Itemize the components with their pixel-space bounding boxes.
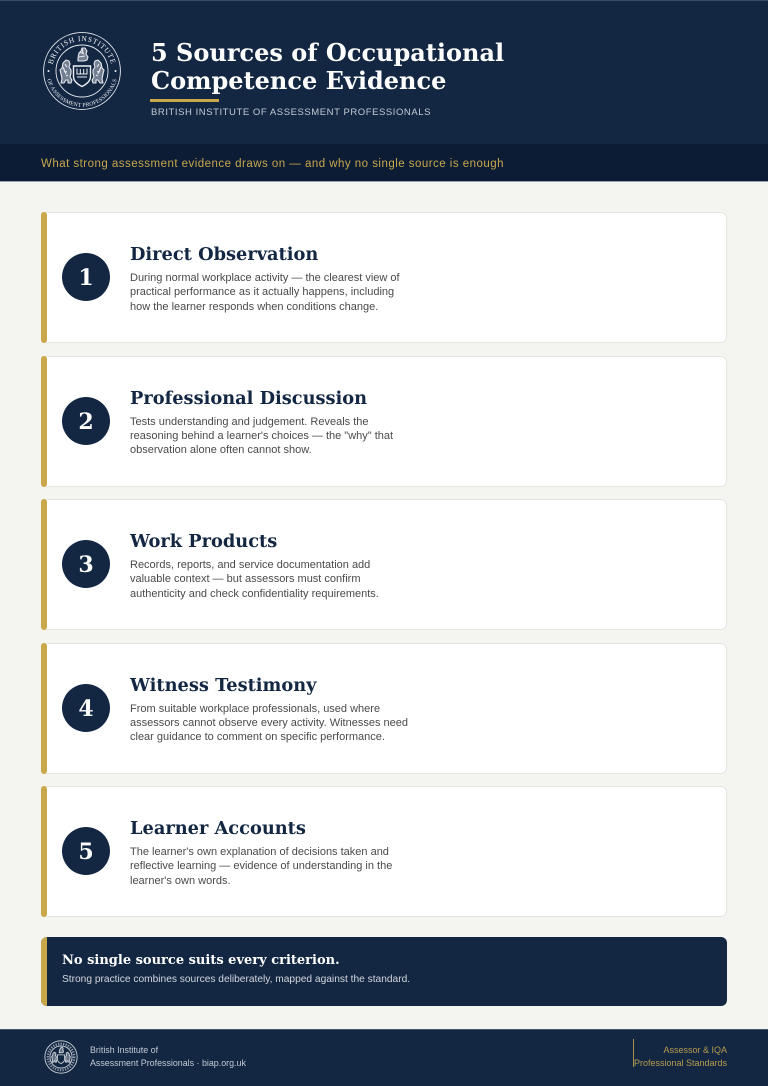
number 3 [62, 540, 110, 588]
description: The learner's own explanation of decisions taken and [130, 846, 389, 858]
footer band [0, 1029, 768, 1086]
callout heading: No single source suits every criterion. [62, 953, 340, 968]
card 5: learner accounts [41, 786, 727, 917]
description: reasoning behind a learner's choices — the "why" that [130, 430, 393, 442]
footer divider [633, 1039, 634, 1067]
title [151, 38, 504, 95]
subtitle: What strong assessment evidence draws on — and why no single source is enough [41, 158, 504, 170]
description [130, 416, 393, 456]
footer right text: Professional Standards [634, 1058, 727, 1068]
number 4: 4 [78, 696, 94, 722]
description [130, 272, 400, 313]
description: Records, reports, and service documentation add [130, 559, 370, 571]
description: From suitable workplace professionals, used where [130, 702, 380, 714]
organisation name: BRITISH INSTITUTE OF ASSESSMENT PROFESSIONALS [151, 106, 431, 118]
card 3: work products [41, 499, 727, 630]
description: authenticity and check confidentiality requirements. [130, 588, 379, 600]
number 2 [62, 396, 110, 444]
description: reflective learning — evidence of understanding in the [130, 860, 392, 872]
number 2: 2 [78, 408, 94, 434]
header band [0, 0, 768, 144]
icon: institute seal: BRITISH INSTITUTE [48, 36, 116, 64]
heading: Work Products [130, 531, 277, 552]
description: observation alone often cannot show. [130, 444, 312, 456]
description [130, 702, 408, 743]
heading: Professional Discussion [130, 388, 367, 408]
description: practical performance as it actually happens, including [130, 286, 394, 298]
callout text: Strong practice combines sources deliberately, mapped against the standard. [62, 974, 410, 984]
description [130, 559, 379, 600]
description [130, 846, 392, 887]
card 4: witness testimony [41, 642, 727, 774]
icon: institute seal [43, 32, 121, 110]
title: 5 Sources of Occupational [151, 38, 504, 67]
gold rule [150, 99, 219, 102]
description: assessors cannot observe every activity. Witnesses need [130, 717, 408, 729]
footer right text: Assessor & IQA [663, 1045, 727, 1055]
footer organisation text [90, 1045, 246, 1068]
description: During normal workplace activity — the clearest view of [130, 272, 400, 284]
card 1: direct observation [41, 212, 727, 343]
number 5 [62, 827, 110, 875]
callout [41, 937, 727, 1006]
description: how the learner responds when conditions change. [130, 301, 378, 313]
footer organisation text: Assessment Professionals · biap.org.uk [90, 1058, 246, 1068]
subtitle band [0, 144, 768, 182]
description: Tests understanding and judgement. Reveals the [130, 416, 368, 428]
icon: footer seal [44, 1040, 78, 1074]
footer right text [634, 1045, 727, 1068]
number 1: 1 [78, 265, 94, 291]
number 4 [62, 684, 110, 732]
footer organisation text: British Institute of [90, 1045, 158, 1055]
heading: Witness Testimony [130, 674, 316, 696]
card 2: professional discussion [41, 356, 727, 486]
icon: institute seal: OF ASSESSMENT PROFESSIONALS [48, 78, 116, 107]
title: Competence Evidence [151, 66, 446, 95]
number 3: 3 [78, 552, 94, 578]
number 5: 5 [78, 839, 94, 865]
description: clear guidance to comment on specific performance. [130, 731, 385, 743]
heading: Direct Observation [130, 244, 318, 265]
number 1 [62, 253, 110, 301]
description: learner's own words. [130, 875, 231, 887]
heading: Learner Accounts [130, 818, 306, 839]
description: valuable context — but assessors must confirm [130, 573, 360, 585]
